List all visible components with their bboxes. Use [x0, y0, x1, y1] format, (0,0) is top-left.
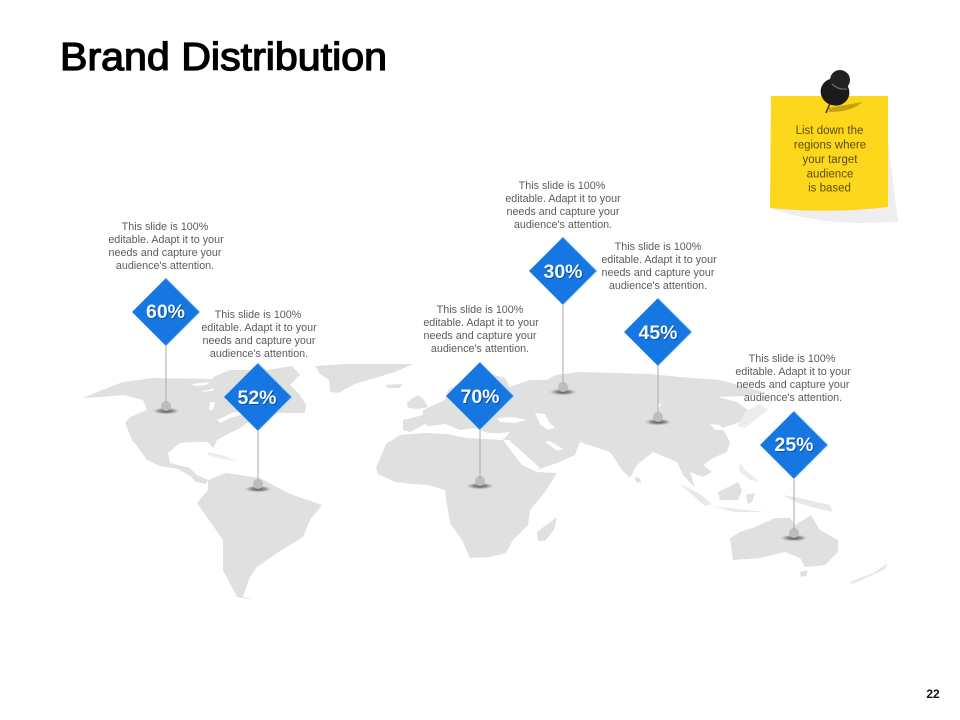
world map [83, 364, 888, 600]
marker: 60% [108, 221, 224, 414]
page number: 22 [926, 687, 940, 701]
sumatra java [680, 484, 765, 512]
mediterranean [410, 424, 510, 438]
north american streaks [192, 382, 247, 423]
diamond: 70% [460, 386, 500, 408]
marker: 70% [423, 304, 539, 490]
diamond: 60% [146, 301, 185, 323]
australia [730, 515, 838, 567]
diamond [529, 237, 597, 305]
note text: audience [807, 168, 853, 180]
description: editable. Adapt it to your [201, 322, 317, 334]
yellow sea [710, 424, 724, 430]
sticky note [770, 67, 898, 223]
description: This slide is 100% [437, 304, 524, 316]
icon: push pin [817, 67, 853, 113]
water cut-outs [192, 382, 724, 470]
marker: 30% [505, 180, 621, 396]
eurasia [403, 372, 767, 488]
diamond [624, 298, 692, 366]
diamond [760, 411, 828, 479]
description: needs and capture your [203, 335, 316, 347]
diamond [446, 362, 514, 430]
description: audience's attention. [116, 260, 214, 272]
pin base [244, 430, 272, 492]
description [108, 221, 224, 272]
note text [794, 125, 866, 194]
description [423, 304, 539, 355]
hudson bay [209, 402, 215, 410]
north america [83, 366, 306, 484]
diamond [224, 363, 292, 431]
diamond: 30% [543, 261, 583, 283]
pin base [466, 429, 494, 490]
pin base [152, 345, 180, 414]
note text: is based [808, 182, 851, 194]
diamond: 45% [638, 322, 678, 344]
description: audience's attention. [514, 219, 612, 231]
note shadow [772, 125, 898, 223]
black sea [497, 417, 527, 423]
japan [738, 404, 768, 428]
new guinea [782, 495, 833, 512]
diamond: 52% [237, 387, 277, 409]
description: audience's attention. [744, 392, 842, 404]
diamond [132, 278, 200, 346]
marker: 25% [735, 353, 851, 542]
sulawesi [746, 493, 755, 504]
description: needs and capture your [737, 379, 850, 391]
description: needs and capture your [109, 247, 222, 259]
lake baikal [658, 402, 662, 410]
red sea [505, 440, 540, 470]
tasmania [800, 570, 808, 577]
madagascar [537, 517, 557, 541]
description: needs and capture your [424, 330, 537, 342]
description: editable. Adapt it to your [108, 234, 224, 246]
cuba [207, 452, 236, 461]
diamond: 25% [774, 434, 814, 456]
marker: 52% [201, 309, 317, 492]
persian gulf [545, 441, 563, 451]
description: needs and capture your [507, 206, 620, 218]
philippines [739, 462, 760, 482]
description: editable. Adapt it to your [423, 317, 539, 329]
iceland [385, 384, 402, 388]
description: editable. Adapt it to your [601, 254, 717, 266]
title: Brand Distribution [60, 36, 387, 79]
description: audience's attention. [210, 348, 308, 360]
description: audience's attention. [431, 343, 529, 355]
description: editable. Adapt it to your [735, 366, 851, 378]
marker: 45% [601, 241, 717, 426]
description: This slide is 100% [749, 353, 836, 365]
description: editable. Adapt it to your [505, 193, 621, 205]
caspian sea [535, 413, 555, 430]
sri lanka [635, 477, 641, 483]
uk and ireland [407, 395, 428, 409]
description: This slide is 100% [215, 309, 302, 321]
description [201, 309, 317, 360]
description: needs and capture your [602, 267, 715, 279]
greenland [315, 364, 413, 393]
pin shadow on note [829, 102, 862, 112]
description [601, 241, 717, 292]
borneo [718, 482, 742, 500]
description: This slide is 100% [615, 241, 702, 253]
note paper [770, 96, 888, 211]
africa [376, 433, 557, 558]
note text: regions where [794, 140, 866, 152]
description [735, 353, 851, 404]
note text: List down the [796, 125, 863, 137]
new zealand [850, 563, 888, 584]
description: This slide is 100% [519, 180, 606, 192]
south america [197, 473, 322, 600]
description: audience's attention. [609, 280, 707, 292]
pin base [549, 304, 577, 396]
description: This slide is 100% [122, 221, 209, 233]
description [505, 180, 621, 231]
pin base [780, 478, 808, 542]
pin base [644, 365, 672, 426]
note text: your target [803, 154, 858, 166]
